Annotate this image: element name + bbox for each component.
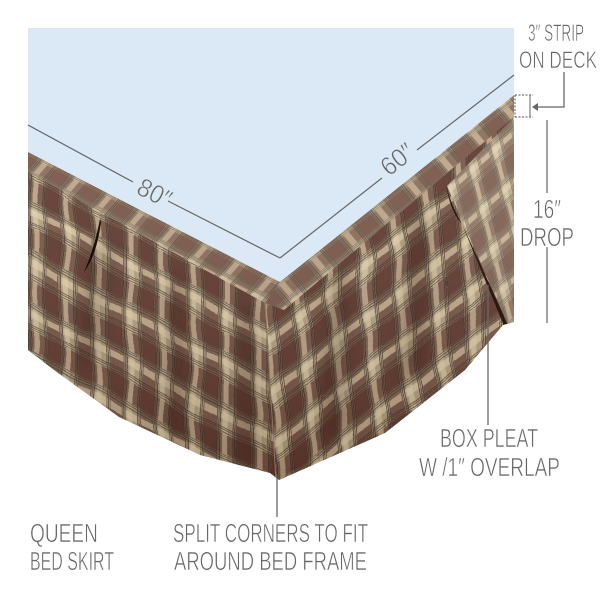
callout: split corners — [173, 475, 368, 576]
bed skirt fabric — [28, 95, 514, 480]
callout: 3 inch strip on deck — [515, 20, 597, 117]
callout: split corners: SPLIT CORNERS TO FIT — [173, 518, 368, 548]
60 inch dimension — [280, 75, 514, 258]
product label: BED SKIRT — [30, 546, 114, 576]
right overlap panel — [447, 117, 514, 325]
left deck strip — [28, 152, 280, 303]
soft fabric folds — [75, 210, 430, 465]
80 inch dimension: 80″ — [132, 172, 177, 214]
right deck strip — [265, 95, 514, 310]
callout: 16 inch drop — [520, 120, 574, 323]
right pleat — [446, 185, 508, 326]
right skirt panel — [265, 117, 514, 480]
product label — [30, 518, 114, 576]
callout: 16 inch drop: 16″ — [533, 194, 561, 224]
mattress deck — [28, 28, 514, 282]
left skirt panel — [28, 172, 277, 478]
left pleat — [84, 219, 101, 272]
corner split — [265, 303, 276, 480]
overall shading — [20, 90, 520, 485]
callout: box pleat: BOX PLEAT — [440, 423, 538, 453]
callout: 16 inch drop: DROP — [520, 222, 574, 252]
80 inch dimension — [28, 125, 280, 258]
callout: box pleat — [419, 285, 560, 482]
product label: QUEEN — [30, 518, 98, 548]
draped plaid panels — [28, 117, 514, 480]
callout: split corners: AROUND BED FRAME — [174, 546, 367, 576]
60 inch dimension: 60″ — [374, 137, 420, 182]
